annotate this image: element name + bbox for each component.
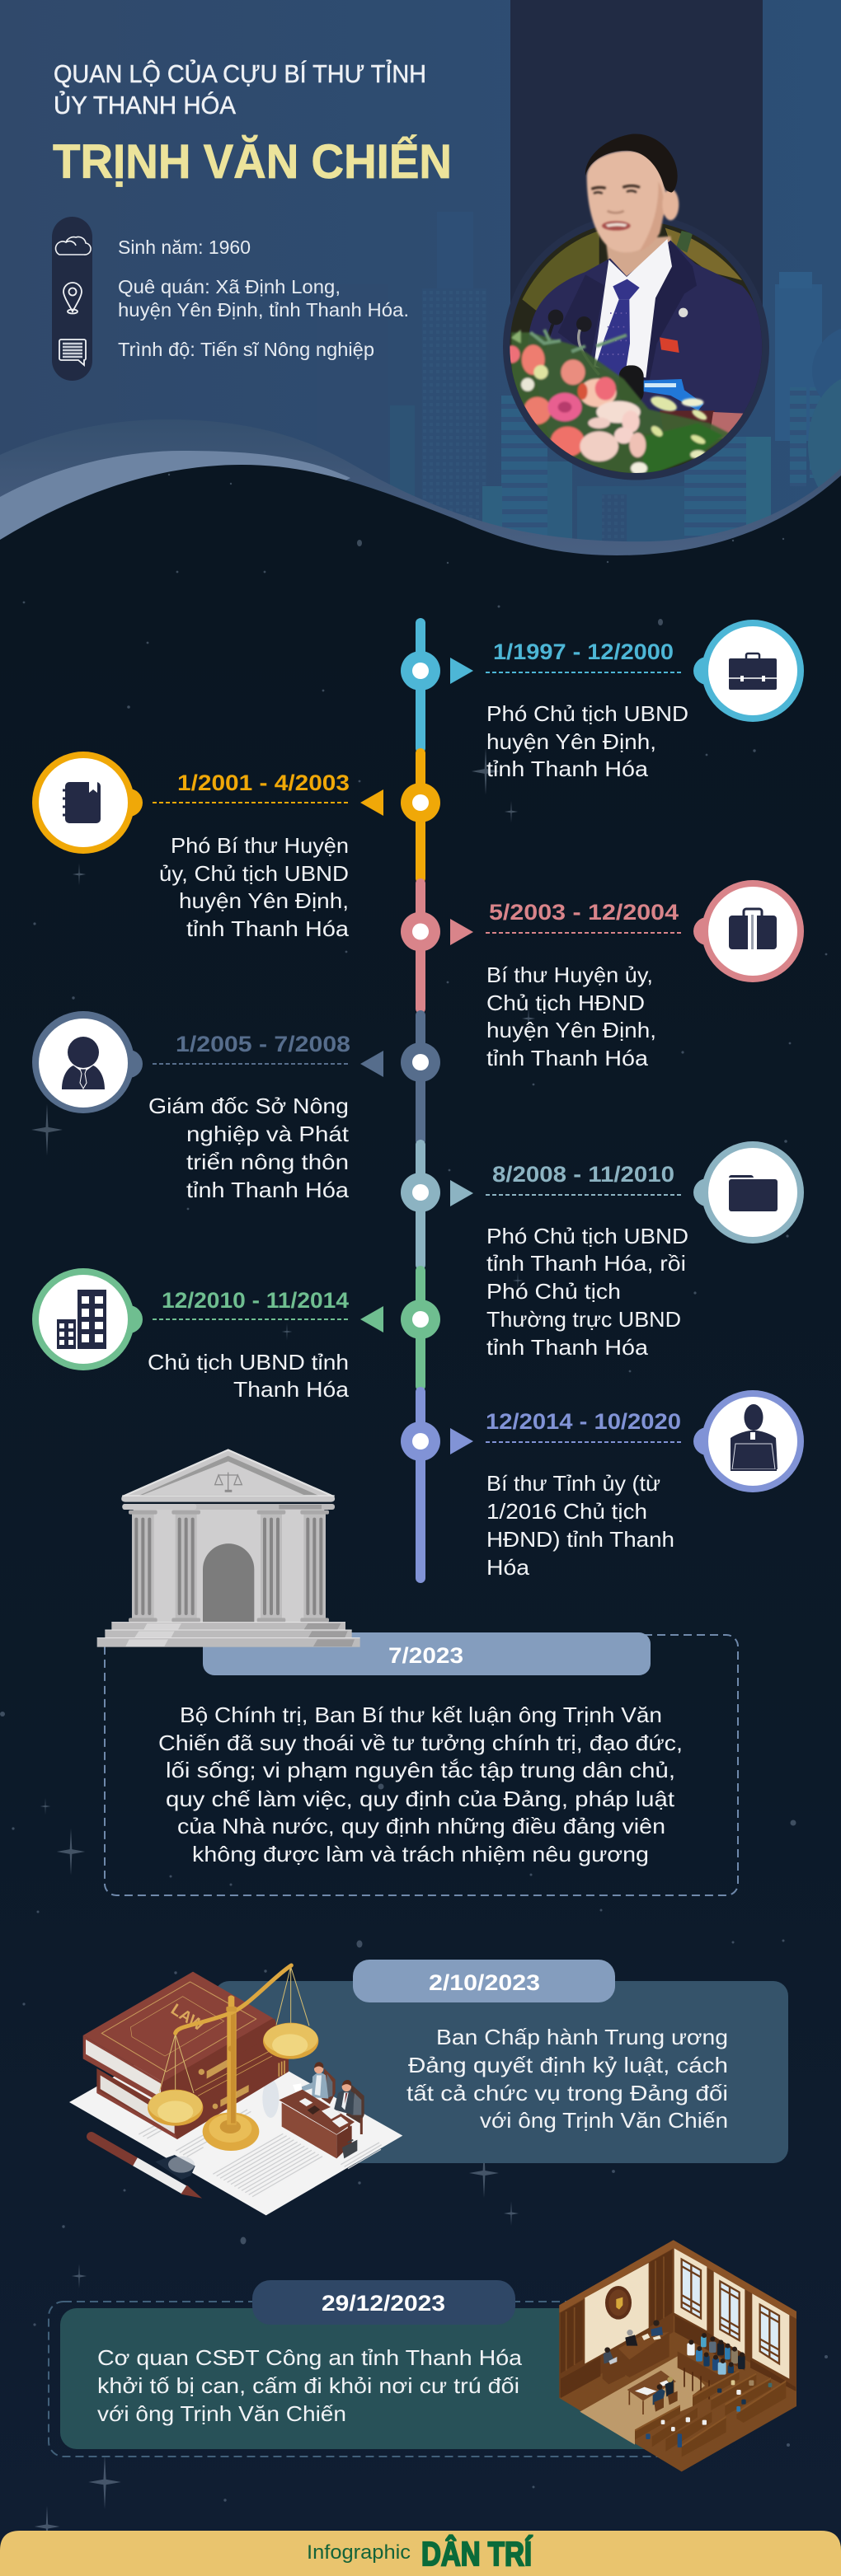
description: triển nông thôn (186, 1150, 349, 1174)
icon: leader at laptop (693, 1390, 804, 1492)
description: tỉnh Thanh Hóa (486, 1335, 649, 1360)
description (486, 701, 688, 781)
header panel (0, 0, 841, 585)
node (401, 1042, 440, 1082)
title line: ỦY THANH HÓA (54, 90, 236, 119)
description: 1/2016 Chủ tịch (486, 1499, 647, 1524)
timeline item 2 (32, 752, 440, 941)
arrow (450, 919, 473, 945)
icon: official (32, 1011, 143, 1113)
conclusion text: quy chế làm việc, quy định của Đảng, pháp luật (166, 1787, 675, 1811)
arrow (450, 1428, 473, 1454)
illustration: courtroom (559, 2240, 796, 2471)
panel: 2/10/2023: 2/10/2023 (429, 1970, 540, 1995)
panel: 29/12/2023 (49, 2280, 676, 2457)
book title: LAW (167, 2001, 207, 2035)
arrow (360, 789, 383, 816)
logo: Dân trí: DÂN TRÍ (421, 2535, 533, 2573)
date tag (353, 1960, 615, 2002)
description (486, 1224, 688, 1360)
decision text: Đảng quyết định kỷ luật, cách (408, 2053, 728, 2077)
name heading: TRỊNH VĂN CHIẾN (53, 135, 452, 189)
node (401, 1300, 440, 1339)
description: nghiệp và Phát (186, 1122, 350, 1146)
conclusion text: lối sống; vi phạm nguyên tắc tập trung dân chủ, (166, 1758, 675, 1782)
description: Phó Chủ tịch UBND (486, 701, 688, 726)
node (401, 911, 440, 951)
description: tỉnh Thanh Hóa, rồi (486, 1251, 686, 1276)
prosecution text: với ông Trịnh Văn Chiến (97, 2401, 346, 2426)
sparkle stars (31, 748, 535, 2548)
icon: chat list (59, 340, 86, 365)
date tag (203, 1632, 651, 1675)
illustration: courthouse (97, 1449, 360, 1647)
footer bar (0, 2531, 841, 2576)
node (401, 651, 440, 691)
description: Giám đốc Sở Nông (148, 1094, 349, 1118)
title line: QUAN LỘ CỦA CỰU BÍ THƯ TỈNH (54, 59, 426, 88)
prosecution text (97, 2345, 523, 2426)
title line (54, 59, 426, 119)
portrait photo (502, 133, 769, 480)
info: home town: Quê quán: Xã Định Long, (118, 276, 341, 297)
arrow (450, 1180, 473, 1206)
starfield (0, 474, 828, 2502)
icon pill (52, 217, 92, 381)
arrow (360, 1306, 383, 1332)
conclusion text: Bộ Chính trị, Ban Bí thư kết luận ông Trịnh Văn (180, 1703, 662, 1727)
description: Bí thư Huyện ủy, (486, 962, 653, 987)
description: tỉnh Thanh Hóa (186, 916, 350, 941)
prosecution text: khởi tố bị can, cấm đi khỏi nơi cư trú đối (97, 2373, 519, 2398)
timeline item 5 (401, 1141, 804, 1360)
scales (148, 1965, 318, 2151)
node (401, 1421, 440, 1461)
icon: folder (693, 1141, 804, 1244)
panel: 7/2023 (105, 1632, 738, 1895)
arrow (360, 1051, 383, 1077)
description: HĐND) tỉnh Thanh (486, 1527, 674, 1552)
description: Chủ tịch UBND tỉnh (148, 1350, 349, 1375)
timeline item 4 (32, 1011, 440, 1202)
icon: cloud (56, 237, 91, 255)
wave: outer band (0, 419, 841, 585)
info: home town: huyện Yên Định, tỉnh Thanh Hóa. (118, 299, 409, 321)
info: education: Trình độ: Tiến sĩ Nông nghiệp (118, 339, 374, 360)
paper (69, 2049, 402, 2215)
description: huyện Yên Định, (486, 1018, 656, 1042)
date: 1/2001 - 4/2003 (177, 770, 350, 795)
icon: notebook (32, 752, 143, 854)
info: home town (118, 276, 409, 321)
description: tỉnh Thanh Hóa (486, 1046, 649, 1070)
timeline item 7 (401, 1390, 804, 1580)
node (401, 1173, 440, 1212)
description: Phó Chủ tịch (486, 1279, 621, 1304)
description: Bí thư Tỉnh ủy (từ (486, 1471, 660, 1496)
description: huyện Yên Định, (179, 888, 349, 913)
description: Thường trực UBND (486, 1307, 681, 1332)
description (148, 1350, 350, 1402)
description: Phó Chủ tịch UBND (486, 1224, 688, 1248)
icon: buildings (32, 1268, 143, 1370)
description (159, 833, 350, 941)
description: Phó Bí thư Huyện (171, 833, 349, 858)
description: Thanh Hóa (233, 1377, 350, 1402)
footer label: Infographic (307, 2541, 411, 2564)
description: ủy, Chủ tịch UBND (159, 861, 349, 886)
decision text (406, 2025, 728, 2133)
dark vertical band (510, 0, 763, 348)
description (486, 1471, 674, 1580)
prosecution text: Cơ quan CSĐT Công an tỉnh Thanh Hóa (97, 2345, 523, 2370)
timeline item 3 (401, 880, 804, 1070)
date: 1/2005 - 7/2008 (176, 1032, 350, 1056)
description: Hóa (486, 1555, 530, 1580)
description: tỉnh Thanh Hóa (186, 1178, 350, 1202)
date: 12/2010 - 11/2014 (162, 1288, 349, 1313)
wave: dark body edge (0, 465, 841, 626)
date: 5/2003 - 12/2004 (489, 900, 679, 925)
icon: suitcase (693, 880, 804, 982)
description: huyện Yên Định, (486, 729, 656, 754)
icon: location pin (63, 283, 82, 313)
figures at desk (279, 2062, 364, 2158)
decision text: với ông Trịnh Văn Chiến (480, 2108, 728, 2133)
panel: 7/2023: 7/2023 (388, 1643, 463, 1668)
date tag (252, 2280, 515, 2325)
date: 12/2014 - 10/2020 (486, 1409, 681, 1434)
conclusion text: không được làm và trách nhiệm nêu gương (192, 1842, 649, 1866)
conclusion text (158, 1703, 683, 1866)
icon: briefcase (693, 620, 804, 722)
info: birth year: Sinh năm: 1960 (118, 237, 251, 258)
description: tỉnh Thanh Hóa (486, 756, 649, 781)
timeline spine (416, 618, 425, 1583)
arrow (450, 658, 473, 684)
books (83, 1972, 289, 2139)
timeline item 6 (32, 1268, 440, 1402)
description (148, 1094, 350, 1202)
panel: 2/10/2023 (214, 1960, 788, 2163)
panel: 29/12/2023: 29/12/2023 (322, 2291, 445, 2316)
conclusion text: của Nhà nước, quy định những điều đảng viên (177, 1814, 665, 1838)
decision text: tất cả chức vụ trong Đảng đối (406, 2081, 728, 2105)
pen (92, 2137, 202, 2199)
conclusion text: Chiến đã suy thoái về tư tưởng chính trị, đạo đức, (158, 1731, 683, 1755)
description (486, 962, 656, 1070)
timeline item 1 (401, 620, 804, 781)
wave: light band (0, 451, 350, 577)
decision text: Ban Chấp hành Trung ương (436, 2025, 728, 2049)
date: 8/2008 - 11/2010 (492, 1162, 674, 1187)
city skyline backdrop (317, 212, 841, 560)
node (401, 783, 440, 822)
description: Chủ tịch HĐND (486, 991, 645, 1015)
date: 1/1997 - 12/2000 (493, 639, 674, 664)
illustration: law books and scales (69, 1965, 402, 2215)
